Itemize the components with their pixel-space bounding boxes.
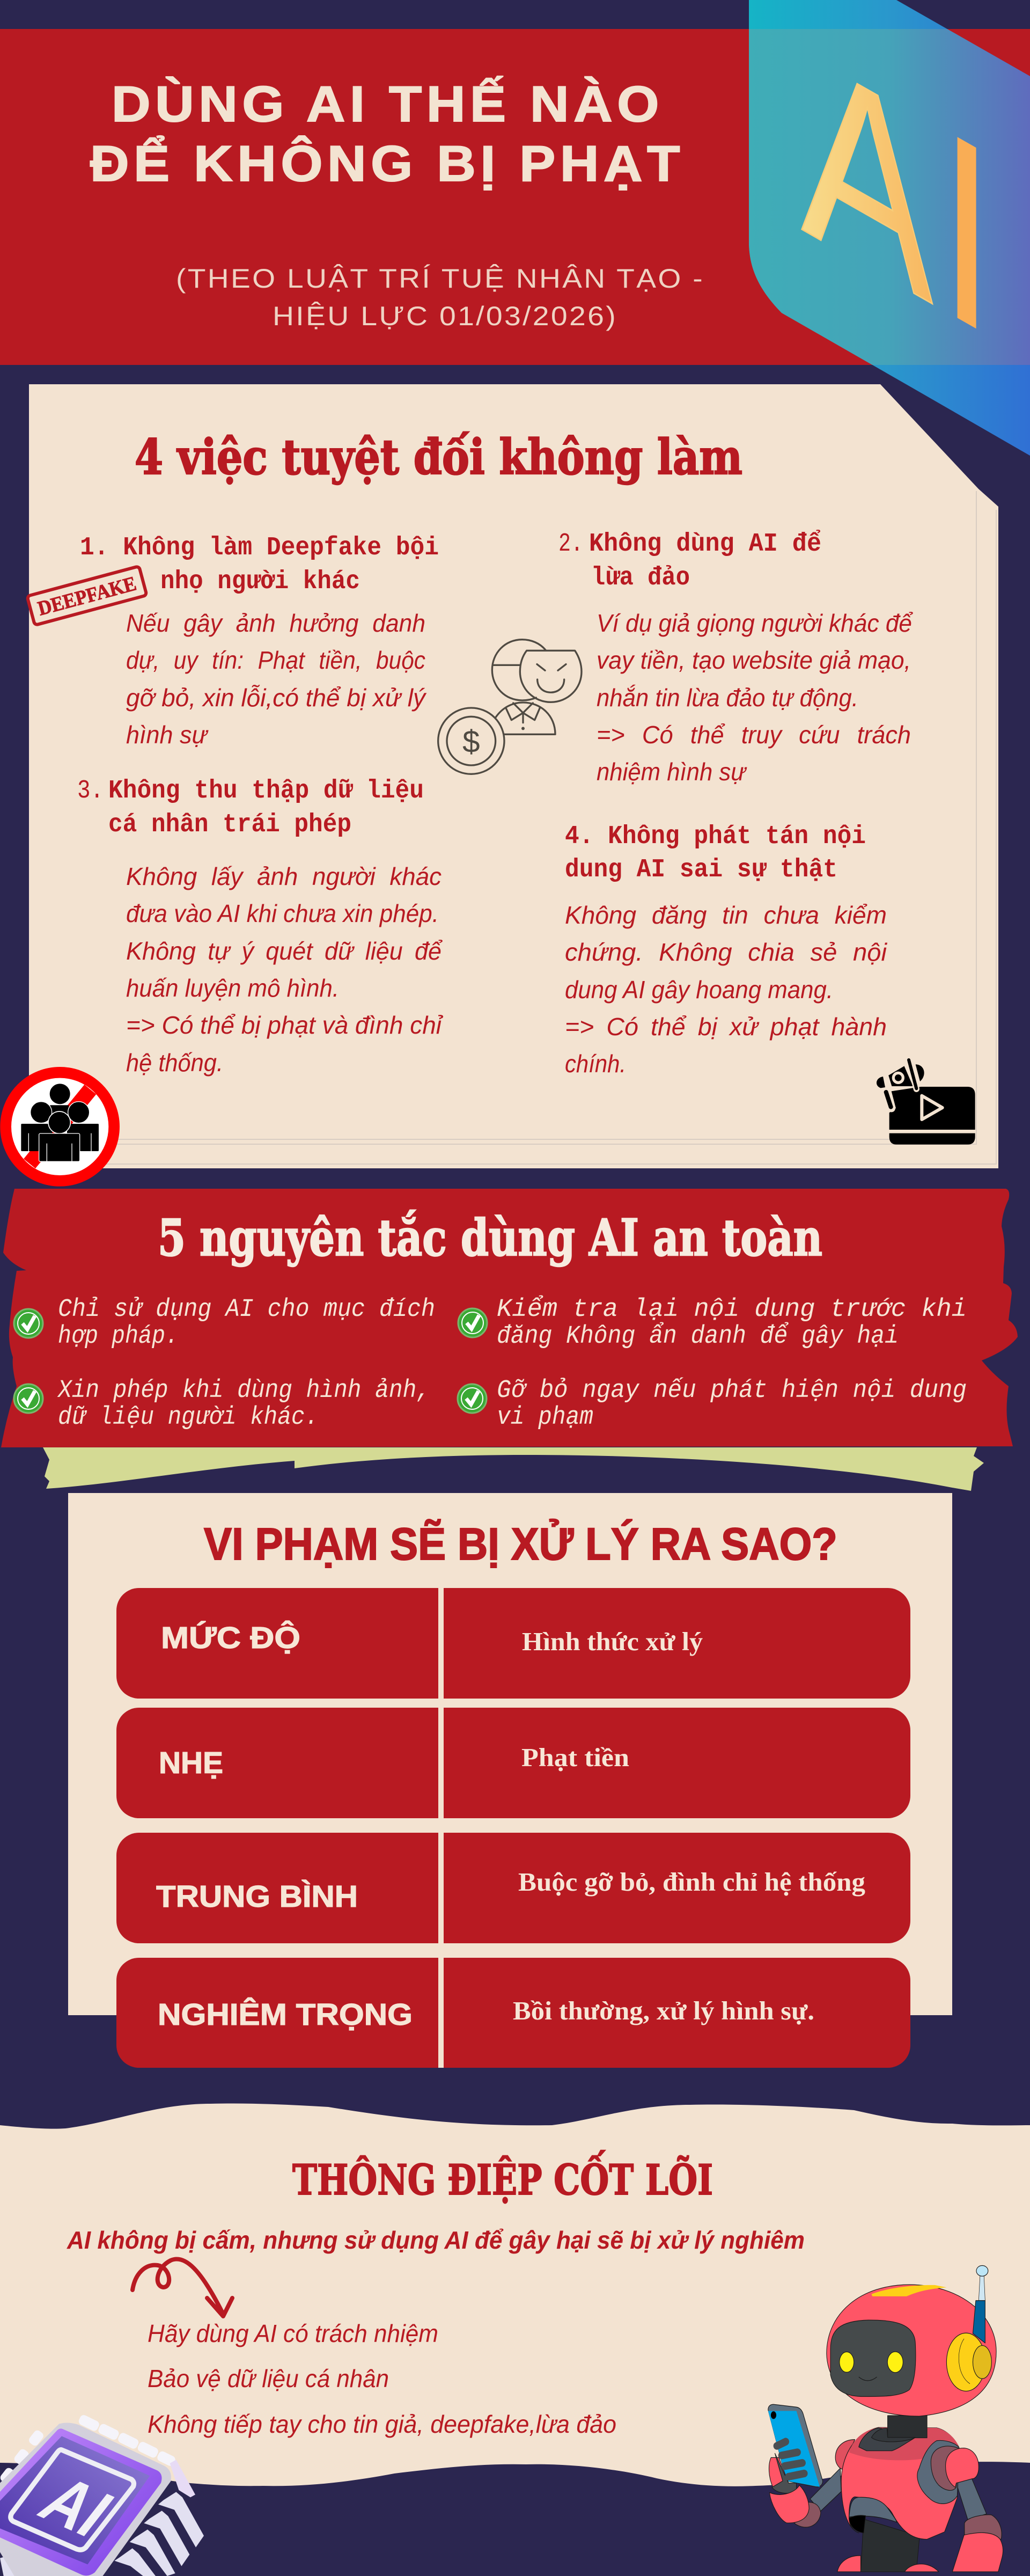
advice list: Bảo vệ dữ liệu cá nhân bbox=[148, 2365, 389, 2392]
item 3 heading: cá nhân trái phép bbox=[108, 810, 351, 839]
subtitle: (THEO LUẬT TRÍ TUỆ NHÂN TẠO - bbox=[176, 264, 704, 294]
item 1 text: hình sự bbox=[126, 721, 209, 749]
robot head bbox=[827, 2285, 996, 2416]
heading: vi phạm: VI PHẠM SẼ BỊ XỬ LÝ RA SAO? bbox=[204, 1519, 837, 1569]
decorative green paper bbox=[43, 1447, 984, 1491]
header AI emblem: I bbox=[939, 69, 995, 395]
principle 4 bbox=[458, 1377, 967, 1432]
icon: scammer with mask and coin bbox=[438, 640, 582, 774]
item 1 text: Nếu gây ảnh hưởng danh bbox=[126, 609, 425, 637]
panel: 4 things not to do bbox=[29, 384, 998, 1168]
row: nhẹ bbox=[116, 1708, 910, 1818]
principle 3: Xin phép khi dùng hình ảnh, bbox=[57, 1377, 430, 1405]
item 2 heading bbox=[558, 530, 821, 592]
item 4 text: dung AI gây hoang mang. bbox=[565, 976, 833, 1004]
row: mức độ: Hình thức xử lý bbox=[522, 1627, 703, 1656]
row: nhẹ: NHẸ bbox=[159, 1746, 223, 1780]
principle 2: Kiểm tra lại nội dung trước khi bbox=[497, 1296, 967, 1324]
header AI emblem bbox=[749, 0, 1030, 456]
robot legs bbox=[860, 2519, 919, 2572]
principle 2 bbox=[458, 1296, 967, 1351]
row: nghiêm trọng bbox=[116, 1958, 910, 2068]
item 3 heading: 3. bbox=[77, 777, 104, 806]
item 2 text: => Có thể truy cứu trách bbox=[597, 721, 911, 749]
title: ĐỂ KHÔNG BỊ PHẠT bbox=[90, 135, 685, 192]
key statement: AI không bị cấm, nhưng sử dụng AI để gây hại sẽ bị xử lý nghiêm bbox=[67, 2226, 805, 2254]
item 3 text: => Có thể bị phạt và đình chỉ bbox=[126, 1011, 444, 1039]
item 3 text: hệ thống. bbox=[126, 1049, 223, 1077]
row: mức độ bbox=[116, 1588, 910, 1699]
item 1 text bbox=[126, 609, 427, 749]
item 4 text: => Có thể bị xử phạt hành bbox=[565, 1013, 887, 1041]
item 2 heading: lừa đảo bbox=[591, 564, 690, 592]
principle 1: Chỉ sử dụng AI cho mục đích bbox=[58, 1296, 435, 1324]
heading: 5 nguyên tắc: 5 nguyên tắc dùng AI an toàn bbox=[158, 1209, 822, 1268]
item 4 heading: 4. Không phát tán nội bbox=[565, 822, 866, 851]
subtitle: HIỆU LỰC 01/03/2026) bbox=[273, 301, 617, 331]
item 4 text bbox=[565, 901, 888, 1078]
robot phone and hand bbox=[768, 2404, 823, 2487]
principle 2: đăng Không ẩn danh để gây hại bbox=[497, 1322, 899, 1351]
row: trung bình: TRUNG BÌNH bbox=[156, 1879, 358, 1914]
item 4 heading bbox=[565, 822, 866, 884]
item 2 text bbox=[597, 609, 913, 786]
panel: 5 principles bbox=[1, 1189, 1018, 1447]
icon: megaphone and video bbox=[877, 1060, 975, 1145]
advice list: Hãy dùng AI có trách nhiệm bbox=[148, 2319, 438, 2347]
row: nghiêm trọng: Bồi thường, xử lý hình sự. bbox=[513, 1996, 814, 2025]
illustration: AI chip bbox=[0, 2414, 204, 2576]
advice list: Không tiếp tay cho tin giả, deepfake,lừa đảo bbox=[148, 2410, 616, 2438]
icon: deepfake stamp: DEEPFAKE bbox=[35, 572, 138, 620]
title: DÙNG AI THẾ NÀO bbox=[112, 76, 664, 132]
item 2 text: nhắn tin lừa đảo tự động. bbox=[597, 684, 858, 712]
item 2 heading: Không dùng AI để bbox=[589, 530, 821, 559]
item 2 heading: 2. bbox=[558, 530, 583, 559]
item 2 text: Ví dụ giả giọng người khác để bbox=[597, 609, 913, 637]
header band bbox=[0, 29, 1030, 365]
title bbox=[90, 76, 685, 192]
row: trung bình bbox=[116, 1833, 910, 1943]
item 2 text: vay tiền, tạo website giả mạo, bbox=[597, 646, 911, 674]
heading: 4 việc: 4 việc tuyệt đối không làm bbox=[135, 429, 742, 486]
illustration: AI chip: AI bbox=[25, 2463, 128, 2550]
panel: core message bbox=[0, 2103, 1030, 2486]
item 4 heading: dung AI sai sự thật bbox=[565, 855, 837, 884]
principle 4: Gỡ bỏ ngay nếu phát hiện nội dung bbox=[497, 1377, 967, 1405]
icon: no crowd sign bbox=[6, 1072, 114, 1181]
item 1 heading bbox=[80, 533, 439, 596]
item 3 text: Không lấy ảnh người khác bbox=[126, 862, 442, 890]
robot body bbox=[841, 2427, 959, 2540]
item 1 heading: nhọ người khác bbox=[160, 567, 360, 596]
item 3 text: huấn luyện mô hình. bbox=[126, 974, 339, 1002]
item 1 text: dự, uy tín: Phạt tiền, buộc bbox=[126, 646, 425, 674]
item 1 heading: 1. Không làm Deepfake bội bbox=[80, 533, 439, 562]
principle 3 bbox=[14, 1377, 430, 1432]
header AI emblem: A bbox=[801, 0, 934, 360]
robot right arm bbox=[957, 2479, 987, 2520]
item 4 text: chính. bbox=[565, 1050, 626, 1078]
item 4 text: chứng. Không chia sẻ nội bbox=[565, 938, 888, 966]
panel: penalties table bbox=[68, 1493, 952, 2068]
item 3 heading: Không thu thập dữ liệu bbox=[108, 777, 424, 806]
arrow bbox=[133, 2259, 232, 2316]
icon: scammer with mask and coin: $ bbox=[462, 724, 480, 759]
row: nhẹ: Phạt tiền bbox=[521, 1743, 629, 1772]
item 1 text: gỡ bỏ, xin lỗi,có thể bị xử lý bbox=[126, 684, 427, 712]
item 2 text: nhiệm hình sự bbox=[597, 758, 747, 786]
item 3 text bbox=[126, 862, 444, 1077]
item 3 heading bbox=[77, 777, 424, 839]
principle 1 bbox=[14, 1296, 435, 1351]
principle 1: hợp pháp. bbox=[58, 1322, 179, 1351]
row: mức độ: MỨC ĐỘ bbox=[161, 1620, 300, 1655]
principle 3: dữ liệu người khác. bbox=[58, 1403, 319, 1432]
item 3 text: đưa vào AI khi chưa xin phép. bbox=[126, 899, 439, 927]
row: nghiêm trọng: NGHIÊM TRỌNG bbox=[158, 1997, 413, 2032]
item 3 text: Không tự ý quét dữ liệu để bbox=[126, 937, 443, 965]
robot left arm bbox=[810, 2468, 841, 2511]
row: trung bình: Buộc gỡ bỏ, đình chỉ hệ thống bbox=[518, 1867, 866, 1897]
item 4 text: Không đăng tin chưa kiểm bbox=[565, 901, 887, 929]
principle 4: vi phạm bbox=[497, 1403, 593, 1432]
heading: thông điệp: THÔNG ĐIỆP CỐT LÕI bbox=[292, 2150, 713, 2205]
advice list bbox=[148, 2319, 616, 2438]
subtitle bbox=[176, 264, 704, 331]
illustration: robot with phone bbox=[768, 2266, 1003, 2572]
